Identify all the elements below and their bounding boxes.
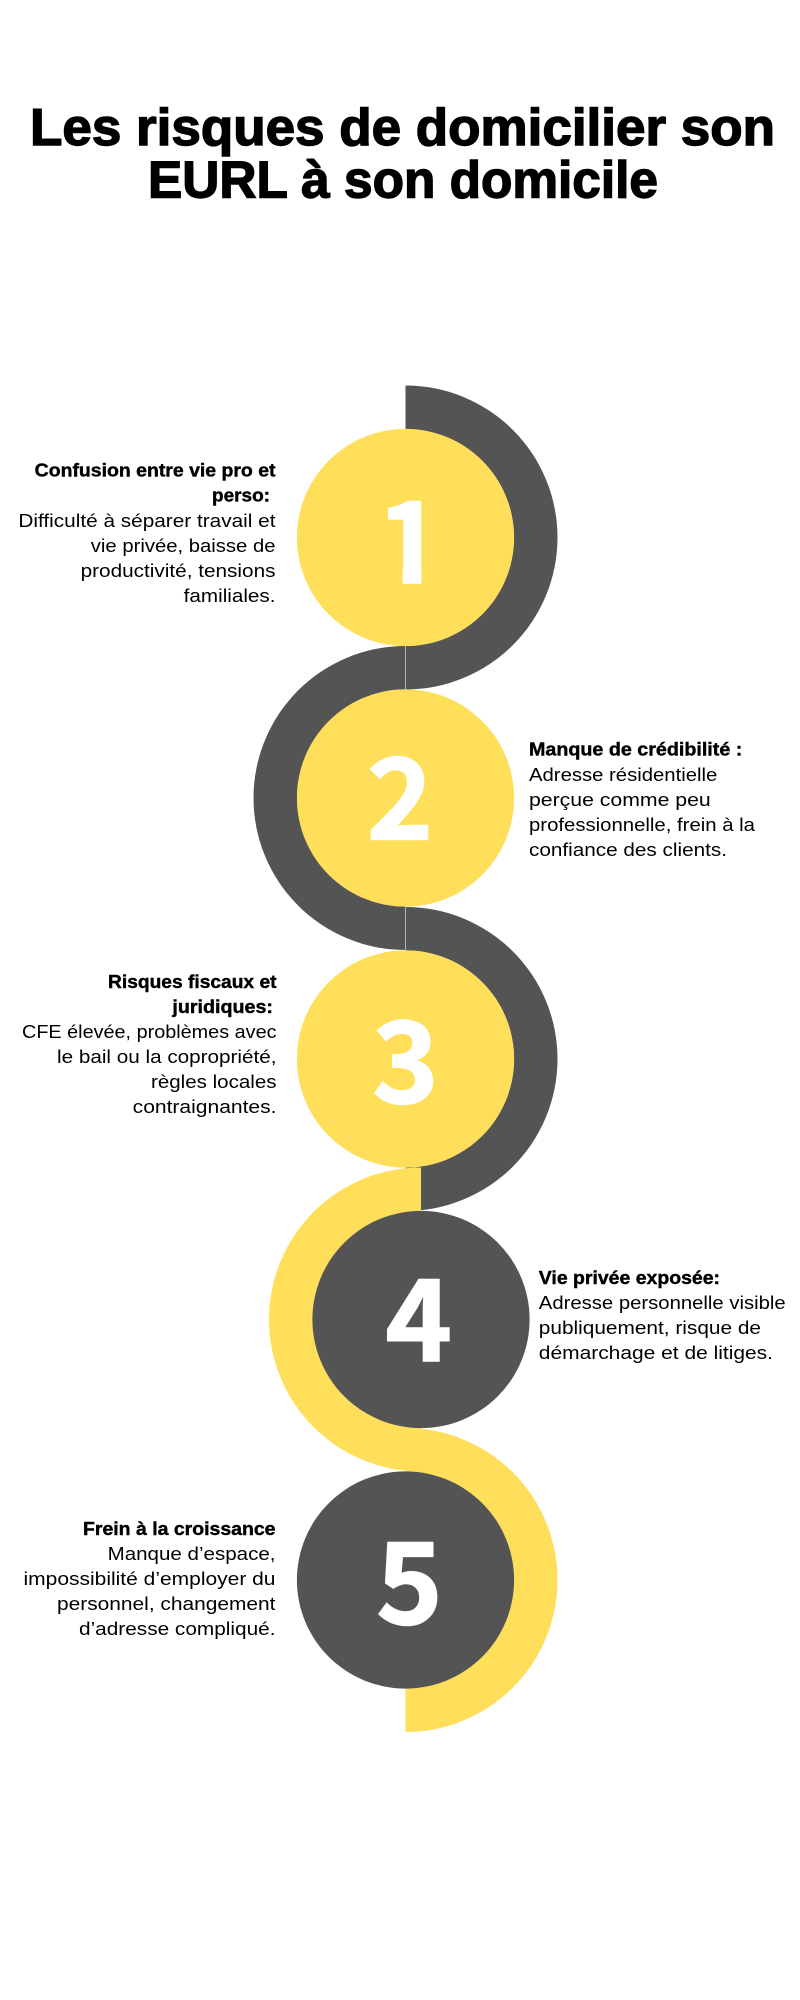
text block: croissance: personnel, changement [57,1594,276,1614]
text block: croissance [24,1519,276,1639]
arc: step 5 band [406,1428,558,1732]
text block: croissance: d’adresse compliqué. [79,1619,276,1639]
text block: crédibilité: Adresse résidentielle [529,765,717,785]
text block: confusion [18,460,276,606]
panel: step 5 [24,1428,558,1732]
text block: crédibilité: perçue comme peu [529,790,711,810]
title [30,99,775,210]
text block: vie privée: Adresse personnelle visible [539,1293,786,1313]
text block: confusion: Difficulté à séparer travail et [18,511,276,531]
panel: step 1 [18,386,557,690]
text block: croissance: impossibilité d’employer du [24,1569,276,1589]
text block: confusion: perso: [212,486,270,506]
title: Les risques de domicilier son [30,99,775,157]
text block: fiscaux: Risques fiscaux et [108,972,277,992]
title: EURL à son domicile [148,152,658,210]
circle: step 4 [312,1211,530,1428]
arc: step 4 band [269,1168,421,1472]
panel: step 2 [254,646,756,950]
number 1: 1 [377,452,443,616]
arc: step 1 band [406,386,558,690]
text block: fiscaux: juridiques: [171,997,273,1017]
number 4: 4 [385,1230,452,1394]
arc: step 2 band [254,646,406,950]
text block: croissance: Frein à la croissance [83,1519,276,1539]
number 5: 5 [376,1493,443,1657]
text block: fiscaux: CFE élevée, problèmes avec [22,1022,276,1042]
text block: fiscaux [22,972,277,1117]
text block: confusion: Confusion entre vie pro et [35,460,276,480]
text block: confusion: vie privée, baisse de [91,536,276,556]
number 2: 2 [367,708,433,872]
text block: fiscaux: le bail ou la copropriété, [57,1047,276,1067]
text block: crédibilité: professionnelle, frein à la [529,815,756,835]
text block: crédibilité [529,740,756,860]
text block: crédibilité: confiance des clients. [529,840,727,860]
circle: step 3 [297,950,514,1168]
text block: fiscaux: règles locales [151,1072,276,1092]
text block: confusion: familiales. [184,586,276,606]
text block: fiscaux: contraignantes. [133,1097,276,1117]
text block: croissance: Manque d’espace, [108,1544,275,1564]
text block: vie privée [539,1268,786,1363]
arc: step 3 band [406,907,558,1211]
circle: step 1 [297,429,514,646]
panel: step 3 [22,907,558,1211]
text block: crédibilité: Manque de crédibilité : [529,740,742,760]
text block: confusion: productivité, tensions [81,561,275,581]
text block: vie privée: démarchage et de litiges. [539,1343,773,1363]
circle: step 5 [297,1471,514,1689]
text block: vie privée: publiquement, risque de [539,1318,761,1338]
circle: step 2 [297,689,514,907]
panel: step 4 [269,1168,786,1472]
text block: vie privée: Vie privée exposée: [539,1268,720,1288]
number 3: 3 [372,972,439,1136]
